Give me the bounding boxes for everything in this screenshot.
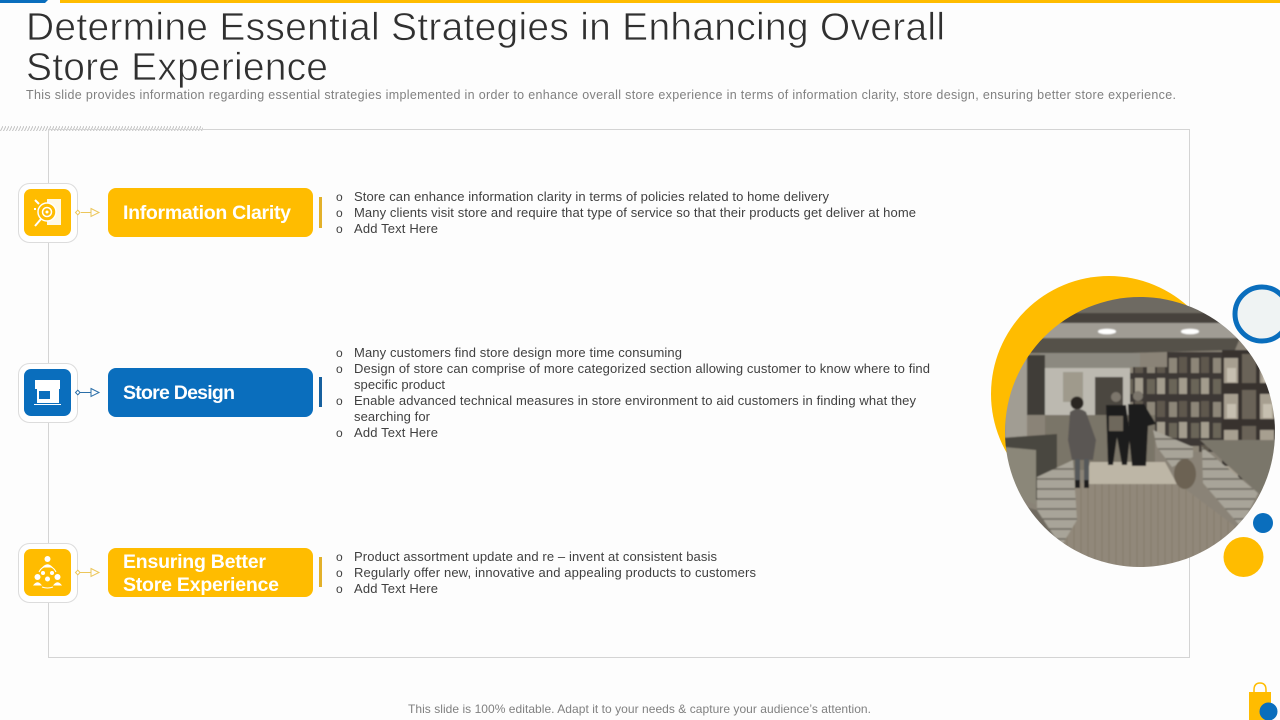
shopper with patterned coat [1068, 396, 1096, 488]
bullet text: Many customers find store design more time consuming [354, 345, 682, 360]
bullet text: o [336, 222, 343, 236]
bullet text: o [336, 206, 343, 220]
icon: information target [18, 184, 78, 242]
label [108, 368, 313, 417]
bullet text: o [336, 362, 343, 376]
bullet text: o [336, 190, 343, 204]
bullet text: o [336, 394, 343, 408]
row: store design [18, 345, 930, 440]
label [108, 188, 313, 237]
bullet text: Enable advanced technical measures in store environment to aid customers in finding what they [354, 393, 916, 408]
connector arrow [76, 208, 99, 216]
content frame [48, 130, 1190, 658]
two shoppers in dark coats [1106, 391, 1156, 466]
icon: shopping bag [1249, 683, 1278, 720]
label: Store Design [123, 382, 235, 404]
icon: customer group [18, 544, 78, 602]
bullet text: Regularly offer new, innovative and appealing products to customers [354, 565, 756, 580]
label [108, 548, 313, 597]
bullet text: Design of store can comprise of more categorized section allowing customer to know where to find [354, 361, 930, 376]
footer note: This slide is 100% editable. Adapt it to your needs & capture your audience’s attention. [408, 702, 871, 716]
decorative yellow circle [991, 276, 1227, 512]
bullet text: specific product [354, 377, 445, 392]
decorative ring [1235, 287, 1280, 341]
bullet text [336, 549, 756, 596]
subtitle: This slide provides information regarding essential strategies implemented in order to enhance overall store experience in terms of information clarity, store design, ensuring better store experience. [26, 88, 1176, 102]
connector arrow [76, 388, 99, 396]
label: Ensuring Better [123, 551, 266, 573]
label: Information Clarity [123, 202, 291, 224]
accent bar [319, 377, 322, 407]
bullet text: Add Text Here [354, 221, 438, 236]
title: Store Experience [26, 46, 328, 89]
bullet text: o [336, 426, 343, 440]
bullet text: searching for [354, 409, 431, 424]
bullet text: Store can enhance information clarity in terms of policies related to home delivery [354, 189, 830, 204]
decorative yellow dot [1224, 537, 1264, 577]
bullet text: o [336, 566, 343, 580]
bullet text: Product assortment update and re – invent at consistent basis [354, 549, 718, 564]
bullet text [336, 189, 916, 236]
icon: storefront [18, 364, 78, 422]
connector arrow [76, 568, 99, 576]
label: Store Experience [123, 574, 279, 596]
bullet text: o [336, 346, 343, 360]
row: information clarity [18, 184, 916, 242]
bullet text [336, 345, 930, 440]
photo: store interior [1000, 290, 1280, 575]
title [26, 6, 945, 89]
bullet text: Many clients visit store and require that type of service so that their products get deliver at home [354, 205, 916, 220]
row: ensuring better store experience [18, 544, 756, 602]
bullet text: o [336, 582, 343, 596]
title: Determine Essential Strategies in Enhancing Overall [26, 6, 945, 49]
bullet text: Add Text Here [354, 581, 438, 596]
hatched divider [0, 126, 203, 131]
bullet text: o [336, 550, 343, 564]
top accent bars [0, 0, 1280, 3]
accent bar [319, 197, 322, 228]
accent bar [319, 557, 322, 587]
bullet text: Add Text Here [354, 425, 438, 440]
decorative blue dot [1253, 513, 1273, 533]
